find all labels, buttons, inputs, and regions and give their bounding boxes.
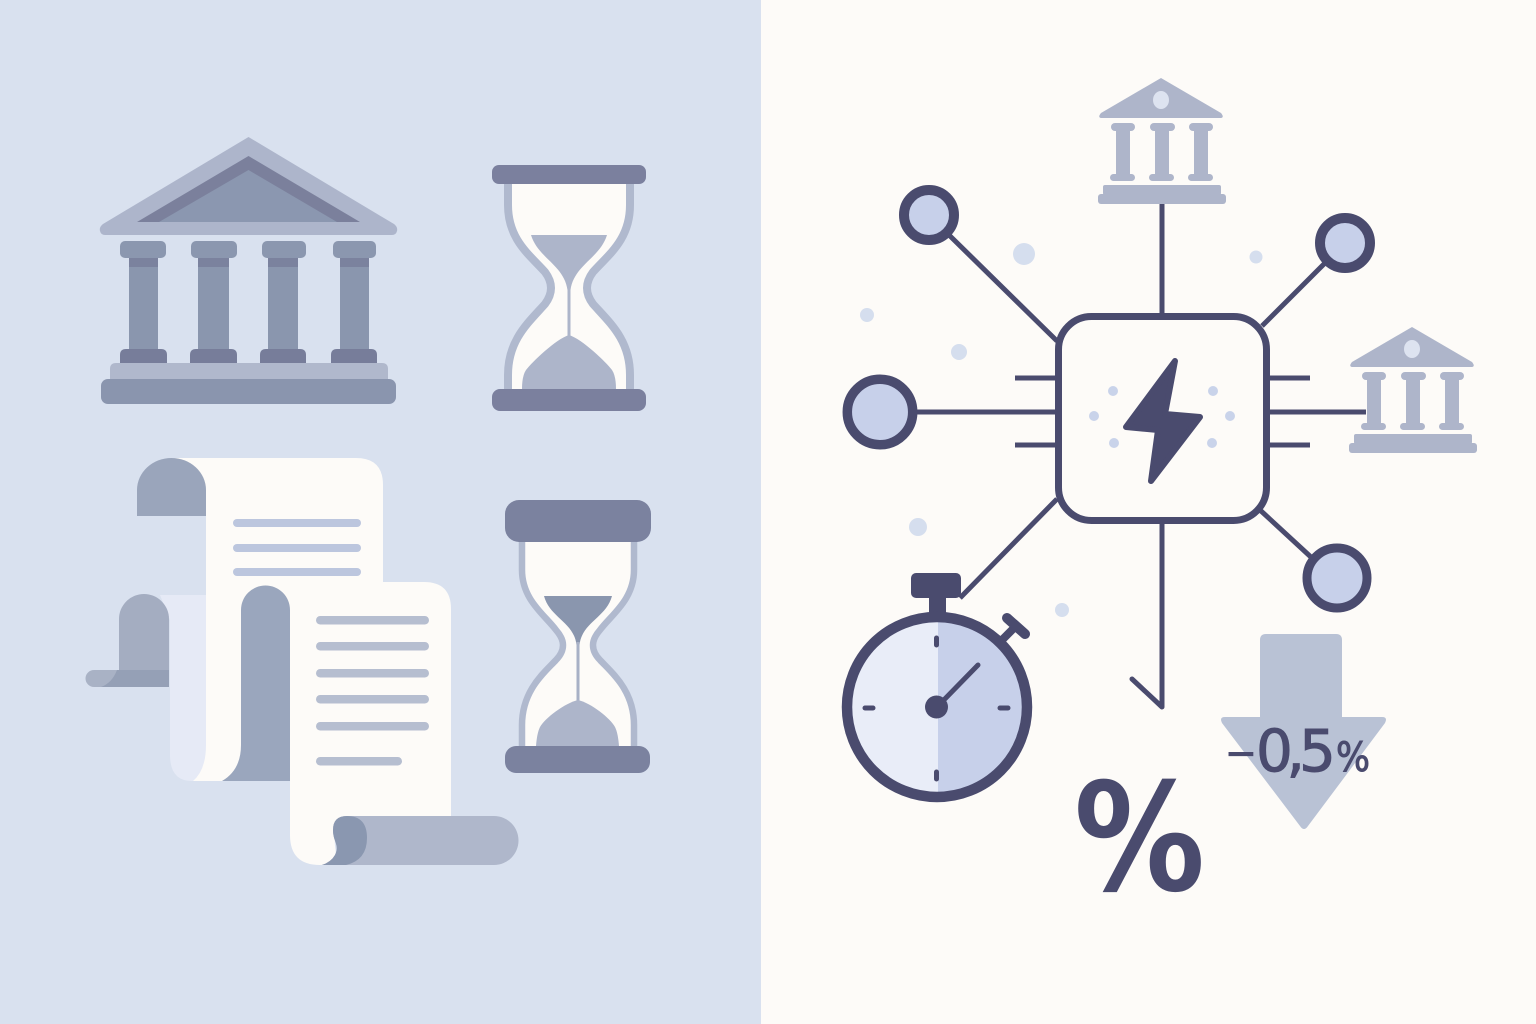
temple columns [120,241,377,363]
bottom sand [522,335,616,389]
rate label: − [1225,731,1257,775]
icon: classical bank temple [100,137,397,404]
hub dots [1089,386,1235,448]
top sand [531,235,607,337]
side button [1000,626,1016,642]
back sheet top curl [137,458,206,516]
temple steps [110,363,388,379]
back sheet shadow fold [222,586,290,781]
temple pediment [137,156,360,222]
icon: stopwatch [847,573,1028,797]
rate label [1225,717,1370,785]
frame bars [505,500,651,542]
glass outline [508,184,630,389]
left scroll dome [119,594,169,670]
crown [929,596,946,616]
front sheet [290,582,451,865]
tick marks [865,638,1008,779]
network node: left [847,379,913,445]
icon: small bank right [1349,327,1477,453]
bottom roll [322,816,518,865]
glass interior [508,184,630,389]
panel: right background [761,0,1536,1024]
temple roof [100,137,397,235]
network node: bottom right [1307,548,1367,608]
left scroll foot [86,670,169,687]
icon: lower hourglass [505,500,651,773]
glass outline [522,542,634,746]
lightning bolt [1126,361,1200,481]
scattered dots [860,243,1262,617]
panel: left background [0,0,761,1024]
scroll light fold [160,595,206,781]
hand and hub [937,665,978,707]
network connector lines [915,203,1366,598]
back sheet [172,458,383,781]
back sheet lines [233,519,361,576]
glass interior [522,542,634,746]
frame bars [492,165,646,184]
front sheet lines [316,616,429,766]
network node: top right [1320,218,1370,268]
icon: central hub with lightning bolt [1058,316,1266,520]
bottom sand [536,700,619,746]
icon: small bank top [1098,78,1226,204]
top sand [544,596,612,645]
rate label: 0,5 [1256,717,1336,785]
large percent sign: % [1074,752,1205,926]
arrow: downward arrow from hub [1132,522,1162,707]
arrow shape [1221,634,1386,829]
icon: down arrow with rate cut [1221,634,1386,829]
icon: upper hourglass [492,165,646,411]
icon: scroll documents [86,458,518,865]
hub box [1058,316,1266,520]
network node: top left [904,190,954,240]
watch face [847,617,1027,797]
rate label: % [1336,735,1370,781]
